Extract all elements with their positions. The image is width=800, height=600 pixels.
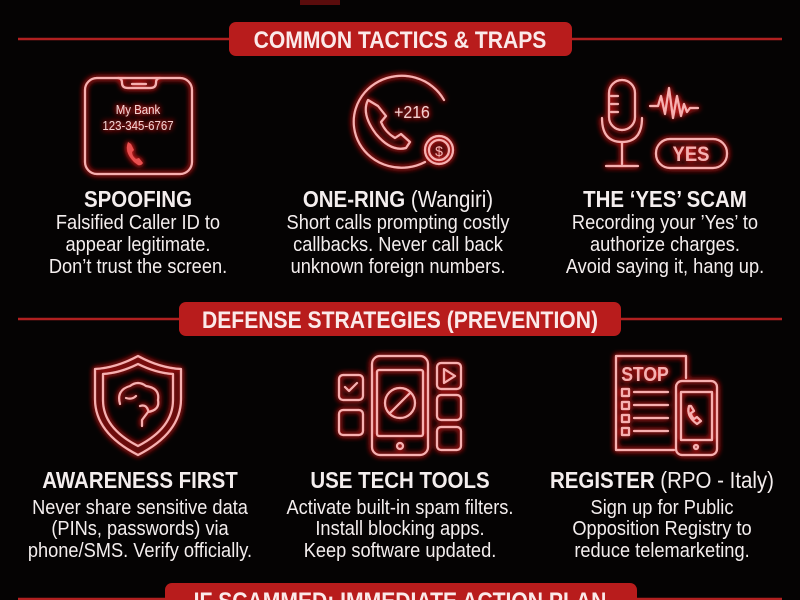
text: register — [550, 467, 774, 562]
banner: common tactics: COMMON TACTICS & TRAPS — [254, 27, 546, 53]
icon: one-ring — [354, 76, 453, 168]
text: one-ring — [287, 186, 510, 278]
text: register: Sign up for Public — [591, 496, 734, 519]
text: spoofing: Falsified Caller ID to — [56, 211, 220, 234]
text: yes scam: THE ‘YES’ SCAM — [583, 186, 747, 212]
icon: tech tools — [339, 356, 461, 455]
text: one-ring: ONE-RING (Wangiri) — [303, 186, 493, 212]
top remnant — [300, 0, 340, 5]
icon: stop registry — [616, 356, 717, 455]
text: tech tools: USE TECH TOOLS — [310, 467, 490, 493]
text: yes scam: Recording your ’Yes’ to — [572, 211, 758, 234]
text: one-ring: Short calls prompting costly — [287, 211, 510, 234]
icon: one-ring: +216 — [394, 102, 430, 122]
banner: defense: DEFENSE STRATEGIES (PREVENTION) — [202, 307, 598, 333]
text: one-ring: unknown foreign numbers. — [291, 255, 505, 278]
text: tech tools: Keep software updated. — [304, 539, 496, 562]
text: yes scam: authorize charges. — [590, 233, 740, 256]
text: yes scam — [566, 186, 764, 278]
icon: stop registry: STOP — [621, 363, 669, 385]
text: awareness: phone/SMS. Verify officially. — [28, 539, 252, 562]
icon: one-ring: $ — [435, 143, 443, 159]
text: spoofing — [49, 186, 227, 278]
text: tech tools — [287, 467, 513, 562]
text: register: REGISTER (RPO - Italy) — [550, 467, 774, 493]
text: one-ring: callbacks. Never call back — [293, 233, 503, 256]
icon: yes scam: YES — [673, 143, 709, 166]
text: tech tools: Install blocking apps. — [315, 517, 485, 540]
banner: action plan — [18, 583, 782, 600]
text: register: reduce telemarketing. — [574, 539, 750, 562]
icon: spoofing phone: My Bank — [116, 102, 161, 117]
text: register: Opposition Registry to — [572, 517, 752, 540]
icon: spoofing phone — [85, 78, 192, 174]
text: yes scam: Avoid saying it, hang up. — [566, 255, 764, 278]
text: awareness: Never share sensitive data — [32, 496, 248, 519]
text: awareness: (PINs, passwords) via — [51, 517, 229, 540]
icon: shield brain — [95, 356, 181, 455]
text: awareness: AWARENESS FIRST — [42, 467, 238, 493]
text: spoofing: appear legitimate. — [66, 233, 210, 256]
text: spoofing: SPOOFING — [84, 186, 192, 212]
banner: defense — [18, 302, 782, 336]
text: awareness — [28, 467, 252, 562]
icon: spoofing phone: 123-345-6767 — [102, 118, 174, 133]
text: spoofing: Don’t trust the screen. — [49, 255, 227, 278]
banner: common tactics — [18, 22, 782, 56]
text: tech tools: Activate built-in spam filters. — [287, 496, 513, 519]
icon: yes scam — [602, 80, 727, 168]
